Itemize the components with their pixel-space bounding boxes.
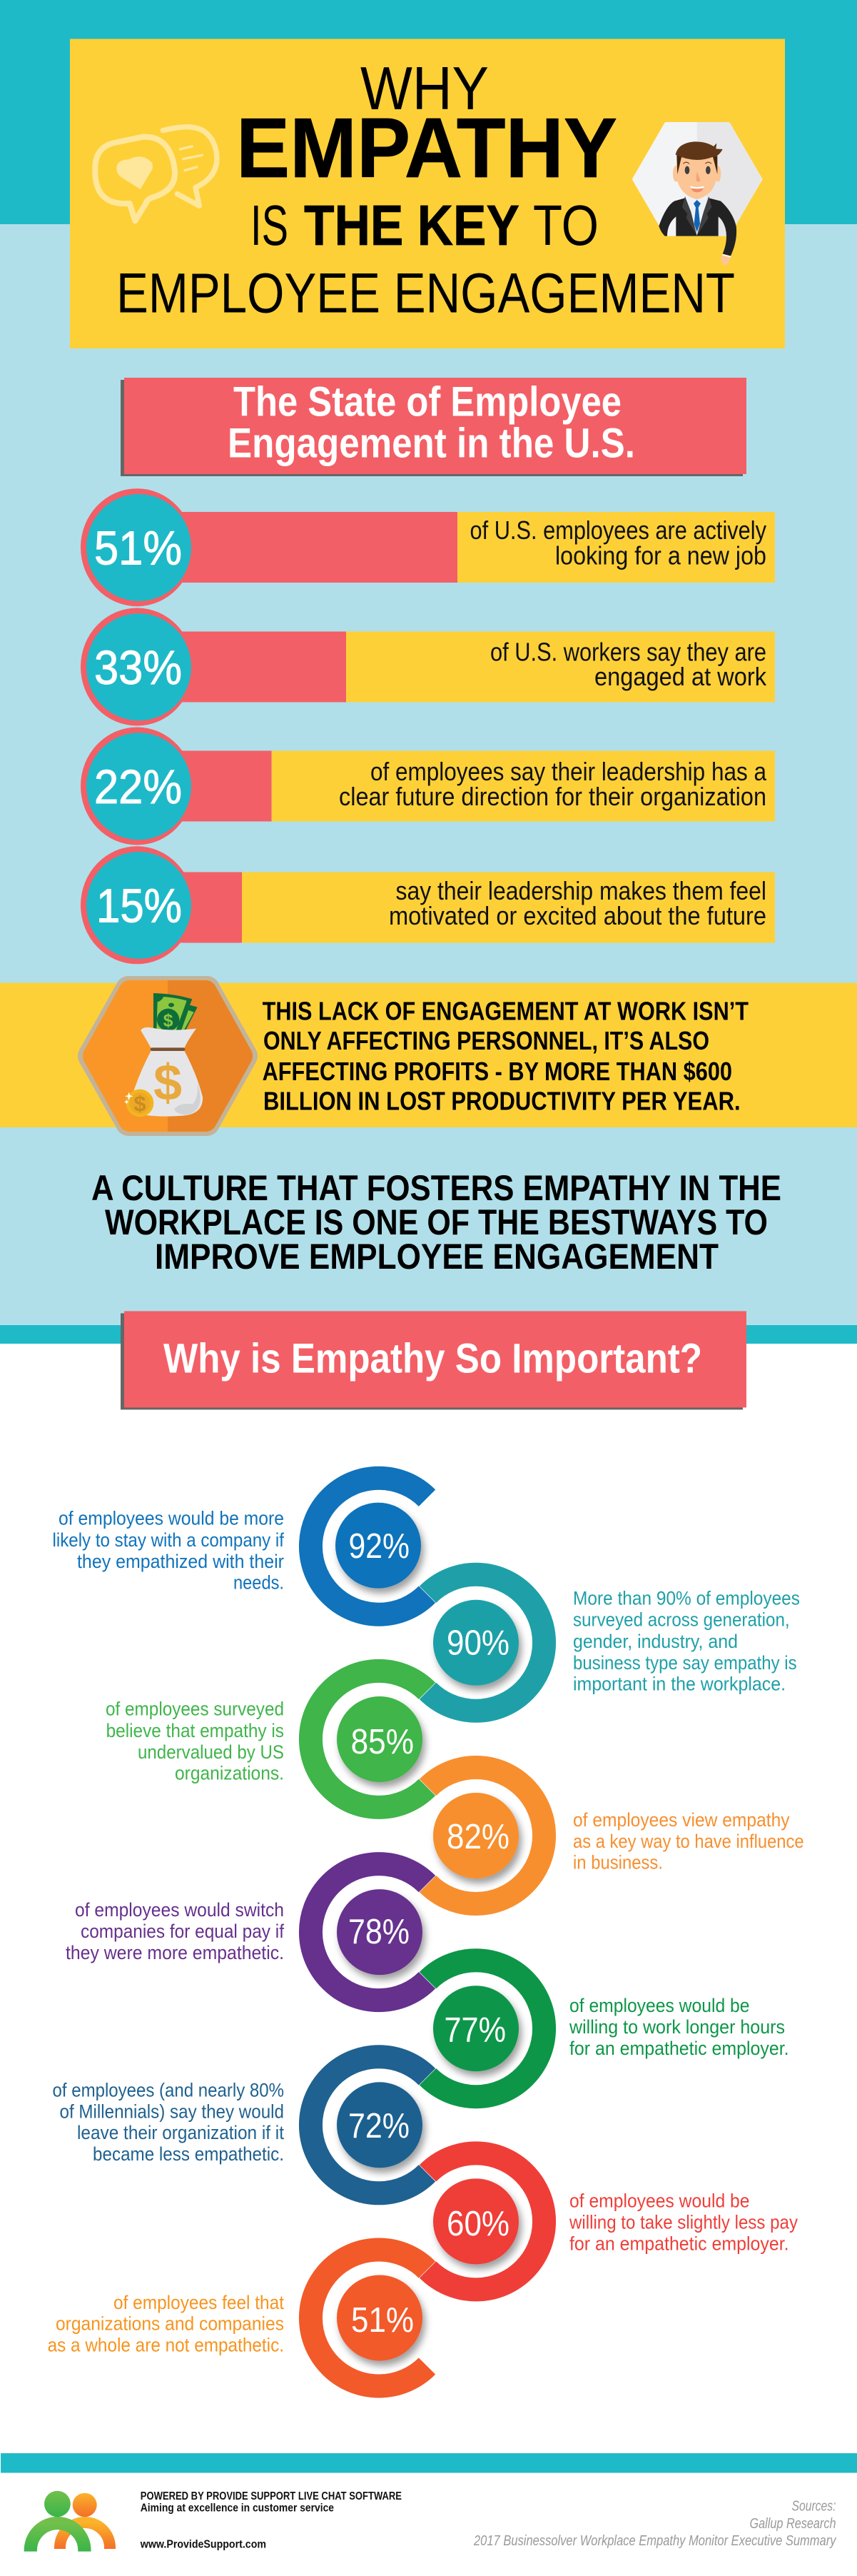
chart: 90% ring: gender, industry, and: [573, 1631, 738, 1652]
chart: 72% ring: [53, 2057, 427, 2193]
chart: 51% ring: [48, 2250, 427, 2386]
stat row: 33%: of U.S. workers say they are: [490, 637, 766, 667]
chart: 77% ring: [428, 1961, 789, 2097]
stat row: 15%: 15%: [96, 880, 182, 933]
stat row: 22%: 22%: [94, 760, 182, 814]
chart: 78% ring: 78%: [348, 1913, 410, 1951]
chart: 60% ring: willing to take slightly less pay: [569, 2211, 798, 2233]
panel: title banner: [70, 39, 785, 348]
chart: 78% ring: companies for equal pay if: [81, 1921, 284, 1942]
chart: 72% ring: of Millennials) say they would: [60, 2100, 284, 2122]
chart: 60% ring: for an empathetic employer.: [569, 2233, 789, 2254]
stat row: 22%: [81, 727, 775, 845]
statement: culture that fosters empathy: IMPROVE EMPLOYEE ENGAGEMENT: [155, 1237, 719, 1277]
chart: 90% ring: surveyed across generation,: [573, 1609, 790, 1631]
footer: sources: Sources:: [792, 2499, 836, 2515]
chart: 60% ring: 60%: [447, 2205, 509, 2243]
chart: 60% ring: of employees would be: [569, 2190, 749, 2212]
stat row: 51%: of U.S. employees are actively: [470, 515, 766, 545]
callout text: ONLY AFFECTING PERSONNEL, IT’S ALSO: [263, 1026, 709, 1055]
stat row: 33%: [81, 608, 775, 725]
stat row: 33%: 33%: [94, 641, 182, 695]
chart: 82% ring: in business.: [573, 1852, 663, 1873]
callout text: [263, 996, 749, 1116]
section heading: Why is Empathy So Important: Why is Empathy So Important?: [163, 1336, 702, 1382]
chart: 85% ring: of employees surveyed: [106, 1698, 284, 1719]
chart: 78% ring: [66, 1864, 427, 2001]
title: EMPLOYEE ENGAGEMENT: EMPLOYEE ENGAGEMENT: [116, 261, 735, 324]
chart: 90% ring: More than 90% of employees: [573, 1588, 800, 1609]
section heading: The State of Employee Engagement: [121, 378, 746, 476]
statement: culture that fosters empathy: A CULTURE THAT FOSTERS EMPATHY IN THE: [91, 1168, 781, 1208]
chart: 51% ring: organizations and companies: [56, 2313, 284, 2335]
stat row: 15%: say their leadership makes them feel: [395, 876, 766, 905]
chart: 92% ring: needs.: [233, 1572, 284, 1594]
title: IS THE KEY TO: IS: [250, 193, 288, 257]
chart: 60% ring: [428, 2153, 798, 2290]
section heading: The State of Employee Engagement: The State of Employee: [233, 379, 622, 426]
section heading: Why is Empathy So Important: [121, 1311, 746, 1409]
chart: 82% ring: as a key way to have influence: [573, 1831, 804, 1852]
chart: 77% ring: of employees would be: [569, 1995, 749, 2016]
chart: 77% ring: for an empathetic employer.: [569, 2038, 789, 2059]
stat row: 15%: [81, 846, 775, 964]
stat row: 22%: clear future direction for their organization: [339, 782, 766, 811]
icon: Provide Support logo: [31, 2491, 110, 2552]
title: IS THE KEY TO: TO: [533, 193, 599, 257]
title: WHY: WHY: [360, 55, 489, 123]
footer: provider credit: www.ProvideSupport.com: [140, 2539, 266, 2551]
chart: 51% ring: of employees feel that: [113, 2292, 284, 2313]
chart: 77% ring: 77%: [444, 2011, 506, 2050]
footer: provider credit: Aiming at excellence in customer service: [141, 2502, 334, 2515]
chart: 92% ring: [53, 1478, 427, 1614]
chart: 85% ring: 85%: [351, 1723, 414, 1761]
icon: money bag in hexagon: $: [153, 1055, 182, 1112]
chart: 90% ring: 90%: [447, 1624, 509, 1663]
chart: 78% ring: they were more empathetic.: [66, 1942, 284, 1963]
chart: 82% ring: 82%: [447, 1818, 509, 1856]
chart: 92% ring: likely to stay with a company if: [53, 1529, 284, 1551]
chart: 92% ring: 92%: [348, 1527, 410, 1566]
chart: 92% ring: of employees would be more: [59, 1508, 284, 1529]
icon: money bag in hexagon: $: [133, 1092, 146, 1116]
chart: 51% ring: as a whole are not empathetic.: [48, 2335, 284, 2356]
callout text: BILLION IN LOST PRODUCTIVITY PER YEAR.: [263, 1087, 741, 1116]
callout text: AFFECTING PROFITS - BY MORE THAN $600: [263, 1057, 732, 1086]
chart: 72% ring: leave their organization if it: [77, 2122, 284, 2143]
chart: 72% ring: of employees (and nearly 80%: [53, 2079, 284, 2100]
stat row: 51%: looking for a new job: [555, 541, 766, 570]
chart: 72% ring: became less empathetic.: [93, 2143, 284, 2165]
stat row: 22%: of employees say their leadership has a: [370, 757, 767, 786]
icon: money bag in hexagon: [91, 989, 245, 1123]
stat row: 33%: engaged at work: [594, 662, 767, 691]
icon: money bag in hexagon: $: [163, 1011, 173, 1030]
chart: 82% ring: [428, 1768, 804, 1904]
chart: 85% ring: [106, 1671, 427, 1807]
chart: 90% ring: [428, 1574, 800, 1711]
panel: lost productivity callout: [0, 983, 857, 1127]
statement: culture that fosters empathy: [91, 1168, 781, 1277]
footer band: [1, 2453, 857, 2473]
chart: 92% ring: they empathized with their: [77, 1551, 284, 1572]
chart: 72% ring: 72%: [348, 2107, 410, 2145]
icon: businessman in hexagon: [634, 122, 762, 265]
chart: 90% ring: important in the workplace.: [573, 1674, 786, 1695]
title: IS THE KEY TO: THE KEY: [304, 193, 519, 257]
chart: 82% ring: of employees view empathy: [573, 1809, 790, 1831]
chart: 90% ring: business type say empathy is: [573, 1652, 797, 1674]
chart: 85% ring: organizations.: [175, 1763, 284, 1784]
footer: sources: Gallup Research: [749, 2516, 836, 2532]
section heading: The State of Employee Engagement: Engagement in the U.S.: [228, 421, 635, 467]
chart: 77% ring: willing to work longer hours: [569, 2016, 785, 2038]
footer: provider credit: POWERED BY PROVIDE SUPPORT LIVE CHAT SOFTWARE: [141, 2490, 402, 2502]
stat row: 51%: 51%: [94, 522, 182, 575]
stat row: 15%: motivated or excited about the future: [389, 901, 766, 930]
callout text: THIS LACK OF ENGAGEMENT AT WORK ISN’T: [263, 996, 749, 1025]
title: EMPATHY: EMPATHY: [236, 101, 617, 196]
chart: 85% ring: believe that empathy is: [106, 1720, 284, 1741]
chart: 78% ring: of employees would switch: [75, 1899, 284, 1921]
chart: 85% ring: undervalued by US: [138, 1741, 284, 1763]
footer: provider credit: [140, 2490, 402, 2551]
footer: sources: [473, 2499, 836, 2549]
icon: speech bubbles with heart: [95, 127, 217, 221]
stat row: 51%: [81, 488, 775, 606]
statement: culture that fosters empathy: WORKPLACE IS ONE OF THE BESTWAYS TO: [105, 1202, 768, 1242]
chart: 51% ring: 51%: [351, 2301, 414, 2340]
